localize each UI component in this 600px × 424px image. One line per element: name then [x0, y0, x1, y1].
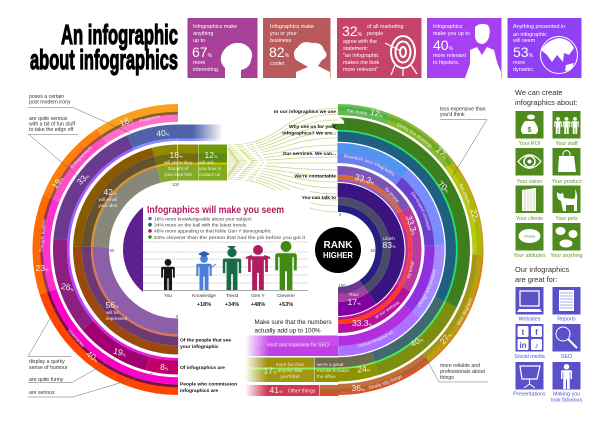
legend: 18% more knowledgeable about your subject: [154, 216, 252, 222]
tile: Websites: Websites: [519, 316, 541, 322]
icon: globe: [540, 36, 578, 74]
callouts: left: [28, 94, 153, 397]
band: other things 41%: 41%: [269, 385, 283, 395]
title: [30, 19, 178, 75]
chart: left semicircular rings: [36, 108, 320, 391]
panel: 53% more dynamic: will seem: [512, 38, 536, 44]
legend: [148, 216, 306, 241]
panel: 67% more interesting: 67%: [192, 44, 213, 60]
panel: 67% more interesting: up to: [193, 38, 205, 44]
tile: Your ROI: Your ROI: [519, 141, 540, 147]
axis numbers: [110, 182, 376, 319]
tile: Social media: in: [519, 341, 527, 350]
tile: Your anything: [550, 223, 583, 259]
ring: what we use: [194, 105, 482, 394]
right ring labels: Ubleh: [383, 236, 395, 241]
icon: target: [385, 36, 417, 76]
right ring labels: by phone: [384, 186, 401, 204]
tile: Social media: [514, 324, 545, 360]
right ring labels: Developed concepts: [411, 192, 430, 230]
band: 17% and 24%: [245, 357, 349, 382]
tile: Your ROI: [516, 111, 544, 147]
left ring labels: 8%: [160, 362, 169, 372]
right ring labels: Research your infographic: [344, 154, 394, 176]
axis numbers: 0: [176, 314, 179, 319]
ring: you can talk to: [278, 190, 398, 309]
icon: wild-haired man: [294, 42, 330, 78]
tile: Reports: Reports: [557, 316, 576, 322]
callouts: left: poses a certain: [29, 94, 64, 100]
callouts: right: you'd think: [440, 112, 465, 118]
heading: great for: are great for:: [515, 275, 557, 284]
callouts: right: less expensive than: [440, 106, 486, 112]
panel: 32% of marketing people: statement:: [343, 46, 368, 52]
ring: reactions: [78, 149, 278, 350]
right ring labels: Deliver finished art: [358, 330, 394, 348]
tile: Your pets: Your pets: [555, 216, 578, 222]
labels: bottom-left ring keys: Of infographics are: [180, 365, 225, 371]
callouts: left: are quite serious: [29, 116, 68, 122]
connector lines: fan to right rings: [228, 108, 338, 212]
panel: 53% more dynamic: [508, 18, 582, 78]
panel: 40% more relevant to hipsters: make you up to: [433, 31, 470, 37]
left ring labels: you how to: [199, 166, 222, 171]
panel: 82% cooler: cooler.: [270, 61, 286, 67]
panel: 40% more relevant to hipsters: Infographics: [433, 24, 463, 30]
left ring labels: 12%: [204, 150, 218, 160]
right ring labels: 17%: [347, 297, 361, 307]
left ring labels: Entrepreneurs: [69, 144, 93, 169]
panel: 32% of marketing people: "an infographic: [343, 53, 379, 59]
centre labels: rings: You can talk to: [302, 195, 336, 201]
tile: Your attitudes: [513, 223, 546, 259]
band: 17% and 24%: 17%: [263, 366, 277, 376]
band: 17% and 24%: the office: [317, 374, 336, 379]
ring: audience traits: [60, 132, 296, 368]
callouts: right: professionals about: [440, 369, 486, 375]
panel: 67% more interesting: more: [193, 60, 205, 66]
panel: 32% of marketing people: more relevant": [343, 67, 378, 73]
panel: 53% more dynamic: Anything presented in: [513, 24, 565, 30]
tile: Social media: Social media: [514, 354, 545, 360]
right ring labels: 40%: [408, 334, 425, 349]
band: 17% and 24%: you'll find: [280, 374, 300, 379]
left ring labels: 40%: [156, 127, 170, 139]
panel: 53% more dynamic: an infographic: [513, 32, 547, 38]
centre labels: rings: infographics? We are...: [282, 130, 337, 136]
left ring labels: [35, 113, 222, 372]
tile: Making you look fabulous: [551, 362, 582, 404]
panel: 67% more interesting: [188, 18, 258, 78]
panel: 40% more relevant to hipsters: to hipsters.: [433, 60, 459, 66]
figure labels: Trend: [226, 293, 239, 299]
figure: Clever: [275, 241, 297, 290]
left ring labels: 18%: [169, 150, 183, 160]
tile: Making you look fabulous: look fabulous: [551, 398, 582, 404]
axis numbers: 100: [338, 283, 346, 288]
logo: Rank Higher: HIGHER: [323, 250, 353, 260]
axis numbers: 50: [371, 248, 376, 253]
figure: You: [161, 259, 175, 290]
left ring labels: will claim they: [164, 160, 193, 165]
left ring labels: 26%: [60, 281, 75, 293]
left ring labels: your idea: [99, 203, 118, 208]
panel: 82% cooler: you or your: [270, 31, 297, 37]
right ring labels: 33.3%: [352, 318, 372, 328]
tile: Your anything: Your anything: [550, 253, 583, 259]
figure: Gen Y: [246, 245, 270, 290]
panel: 40% more relevant to hipsters: 40%: [433, 37, 454, 53]
callouts: left: are serious: [29, 390, 55, 396]
logo: Rank Higher: RANK: [324, 239, 353, 251]
centre labels: rings: Why use us for your: [289, 124, 336, 130]
panel: 32% of marketing people: [337, 18, 422, 78]
figure: Trend: [223, 246, 241, 290]
tile: Websites: [516, 287, 544, 322]
right ring labels: 24%: [357, 363, 371, 375]
panel: 40% more relevant to hipsters: more relevant: [433, 53, 466, 59]
tile: Your clients: Your clients: [516, 216, 543, 222]
axis numbers: 0: [339, 212, 342, 217]
right ring labels: Bar charts: [460, 184, 470, 204]
tile: Your vision: Your vision: [517, 179, 542, 185]
panel: 53% more dynamic: more: [513, 60, 525, 66]
labels: bottom-left ring keys: People who commission: [180, 382, 237, 388]
logo: Rank Higher: [315, 227, 361, 273]
figure labels: Cleverer: [277, 293, 295, 299]
panel: 67% more interesting: interesting.: [193, 67, 219, 73]
figure labels: Gen Y: [251, 293, 266, 299]
left ring labels: 42%: [103, 187, 117, 197]
tile: Your staff: [552, 111, 580, 147]
panel: 82% cooler: 82%: [269, 44, 290, 60]
right ring labels: at our website: [374, 300, 401, 320]
right ring labels: 36%: [351, 383, 365, 393]
note: numbers add up: Make sure that the numbers: [254, 319, 332, 326]
panel: Infographics will make you seem: [143, 190, 310, 308]
figure labels: +18%: [197, 302, 211, 308]
legend: 34% more on the ball with the latest trends: [154, 222, 247, 228]
callouts: right: [425, 106, 488, 382]
ring: our services: [236, 148, 440, 351]
heading: we can create: infographics about:: [515, 98, 577, 107]
right ring labels: 33.3%: [354, 172, 376, 187]
panel: 32% of marketing people: 32%: [342, 23, 363, 39]
right ring labels: 22 %: [468, 208, 482, 223]
right ring labels: 33.3 %: [404, 214, 420, 237]
right ring labels: 83%: [382, 240, 396, 250]
tile: Social media: f: [535, 328, 538, 337]
panel: 53% more dynamic: 53%: [513, 44, 534, 60]
ring: creator types: [36, 108, 320, 391]
tile: Social media: t: [522, 328, 525, 337]
legend: 53% cleverer than the person that had the job before you got it: [154, 235, 306, 241]
left ring labels: 18%: [118, 114, 134, 128]
left ring labels: impressed: [106, 316, 128, 321]
heading: Infographics will make you seem: [147, 205, 284, 216]
centre labels: rings: Our services. We can...: [283, 151, 337, 157]
chart: right semicircular rings: [194, 105, 482, 394]
tile: Your staff: Your staff: [555, 141, 578, 147]
centre labels: rings: [274, 109, 337, 201]
axis numbers: 50: [110, 248, 115, 253]
callouts: left: to take the edge off: [29, 127, 74, 133]
tile: Reports: [552, 287, 580, 322]
band: 17% and 24%: we're a great: [317, 362, 344, 367]
panel: 32% of marketing people: people: [367, 31, 383, 37]
heading: great for: Our infographics: [515, 265, 570, 274]
labels: bottom-left ring keys: your infographic: [180, 344, 219, 350]
callouts: right: more reliable and: [440, 363, 480, 369]
band: 17% and 24%: more fun than: [276, 362, 305, 367]
left ring labels: will be: [106, 310, 119, 315]
tile: Your attitudes: Your attitudes: [513, 253, 546, 259]
centre labels: rings: In our infographics we use: [274, 109, 336, 115]
heading: we can create: We can create: [515, 88, 563, 97]
band: blue 40% extension: [178, 124, 223, 142]
tile: Your ROI: $: [528, 127, 532, 134]
tile: SEO: [552, 324, 580, 360]
right ring labels: 12%: [369, 107, 385, 120]
panel: 82% cooler: Infographics make: [270, 24, 314, 30]
callouts: left: sense of humour: [29, 365, 68, 371]
panel: 82% cooler: business: [270, 38, 292, 44]
left ring labels: 19%: [50, 174, 66, 190]
band: 18% and 12% extension: [178, 144, 227, 180]
figure labels: +48%: [251, 302, 265, 308]
figure labels: Knowledge: [192, 293, 216, 299]
left ring labels: Protectors: [139, 113, 161, 124]
left ring labels: Thought leaders: [39, 218, 47, 253]
band: other things 41%: [245, 384, 338, 396]
ring: contactable: [259, 170, 417, 328]
panel: 40% more relevant to hipsters: [427, 18, 502, 78]
left ring labels: your idea first: [164, 172, 193, 177]
right ring labels: by email: [406, 261, 415, 279]
callouts: left: are quite funny: [29, 377, 64, 383]
figure labels: +53%: [279, 302, 293, 308]
purple inner disc: [123, 194, 233, 304]
title: about infographics: [30, 44, 178, 75]
centre labels: rings: We're contactable: [294, 174, 336, 180]
right ring labels: 27%: [438, 330, 454, 346]
tile: Social media: ♪: [534, 341, 538, 350]
callouts: left: display a quirky: [29, 359, 65, 365]
band: other things 41%: Other things: [288, 388, 316, 394]
panel: 67% more interesting: anything: [193, 31, 213, 37]
left ring labels: Visionaries: [67, 328, 86, 349]
icon: head with brain: [221, 43, 252, 78]
ring: why use us: [212, 124, 464, 375]
figure labels: [164, 293, 295, 308]
right ring labels: Ravi: [349, 292, 359, 297]
figure labels: +34%: [225, 302, 239, 308]
left ring labels: thought of: [168, 166, 189, 171]
left ring labels: 23%: [35, 263, 49, 273]
tile: Making you look fabulous: Making you: [553, 392, 580, 398]
band: 17% and 24%: excuse to leave: [317, 368, 349, 373]
figure: Knowledge: [196, 251, 216, 290]
panel: 32% of marketing people: agree with the: [343, 39, 377, 45]
tile: Your pets: [552, 186, 580, 222]
tile: Presentations: [513, 362, 546, 398]
tile: Your vision: [516, 148, 544, 185]
note: numbers add up: actually add up to 100%: [254, 328, 321, 334]
callouts: right: things: [440, 375, 454, 381]
title: An infographic: [61, 19, 178, 50]
tile: Your product: Your product: [552, 179, 582, 185]
labels: bottom-left ring keys: infographics are: [180, 388, 218, 394]
tile: Your product: [552, 148, 582, 185]
right ring labels: Quirky line drawings: [397, 122, 432, 148]
icon: hipster figure: [465, 24, 501, 78]
tile: Presentations: Presentations: [513, 392, 546, 398]
callouts: left: with a bit of fun stuff: [29, 122, 76, 128]
left ring labels: 19%: [112, 346, 128, 359]
legend: 48% more appealing to that fickle Gen Y demographic: [154, 229, 272, 235]
right ring labels: Design and produce: [417, 269, 436, 307]
left ring labels: 56%: [105, 300, 119, 310]
right ring labels: [344, 107, 482, 393]
left ring labels: will email: [99, 197, 117, 202]
left ring labels: contact us: [199, 172, 221, 177]
band: 17% and 24%: anyone else: [278, 368, 303, 373]
tile: Your attitudes: Oh boy: [524, 234, 535, 238]
band: Host and maximise for SEO: Host and maximise for SEO: [267, 342, 329, 348]
tile: SEO: SEO: [561, 354, 572, 360]
tile: Your clients: [516, 186, 544, 222]
band: Host and maximise for SEO: [245, 335, 338, 356]
right ring labels: Pie charts: [347, 109, 367, 115]
right ring labels: 17%: [434, 145, 451, 161]
axis numbers: 100: [172, 182, 180, 187]
panel: 53% more dynamic: dynamic.: [513, 67, 535, 73]
figure labels: You: [164, 293, 172, 299]
left ring labels: will ask: [199, 160, 215, 165]
right ring labels: Venn diagrams: [456, 298, 472, 325]
panel: 67% more interesting: Infographics make: [193, 24, 237, 30]
panel: 82% cooler: [263, 18, 330, 78]
panel: 32% of marketing people: of all marketing: [367, 24, 404, 30]
labels: bottom-left ring keys: [180, 338, 237, 394]
right ring labels: Really silly things: [368, 375, 402, 389]
panel: 32% of marketing people: makes me look: [343, 60, 380, 66]
right ring labels: 70%: [436, 179, 452, 195]
left ring labels: 33%: [75, 170, 92, 187]
labels: bottom-left ring keys: Of the people that see: [180, 338, 231, 344]
left ring labels: 40%: [85, 349, 101, 365]
callouts: left: post modern irony: [29, 100, 71, 106]
